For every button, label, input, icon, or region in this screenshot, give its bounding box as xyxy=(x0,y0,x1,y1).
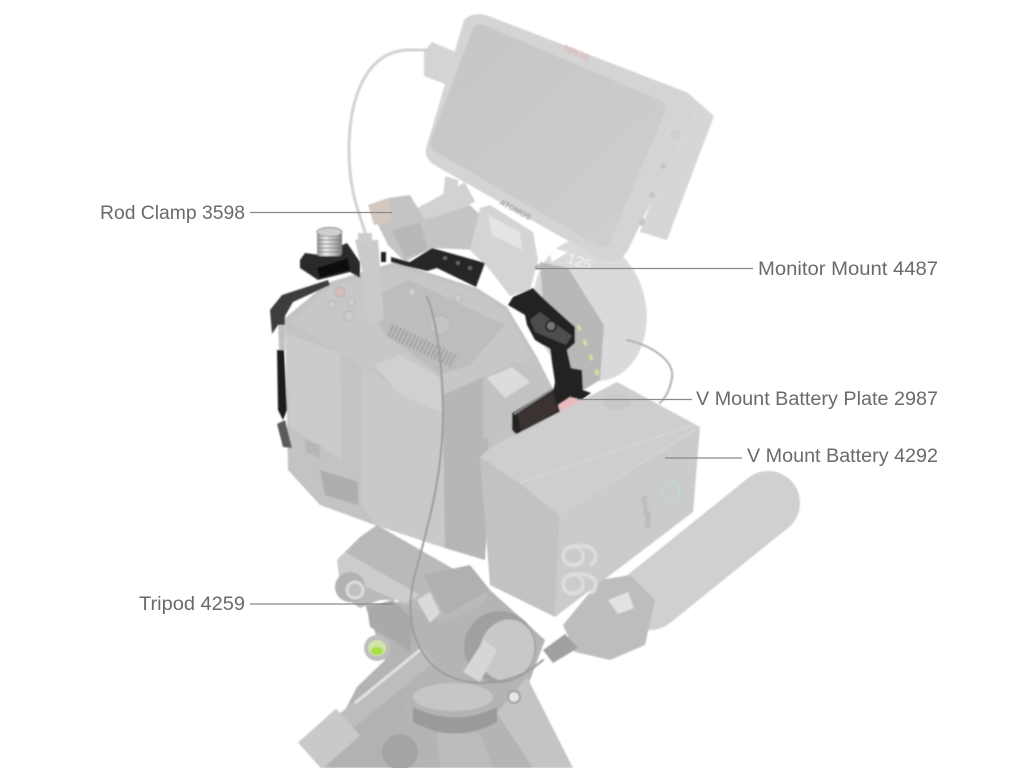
cage top handle mount xyxy=(300,243,360,280)
tripod xyxy=(310,525,573,768)
bracket upper highlight xyxy=(530,312,572,345)
quick release base xyxy=(335,525,490,653)
monitor side buttons xyxy=(638,128,682,226)
monitor xyxy=(424,14,714,262)
bracket screw xyxy=(546,321,556,331)
seam line xyxy=(520,425,693,483)
body silhouette xyxy=(285,262,560,560)
battery back side xyxy=(480,457,560,617)
left leg xyxy=(320,687,413,768)
mount thumb screw xyxy=(608,592,634,614)
top deck xyxy=(290,268,532,395)
NINJA logo: NINJA xyxy=(562,43,591,63)
cage right bracket xyxy=(508,288,591,440)
top rod clamp xyxy=(368,195,490,262)
heat vents xyxy=(390,330,455,362)
monitor mount xyxy=(470,205,541,296)
tripod head xyxy=(463,611,543,688)
ATOMOS logo: ATOMOS xyxy=(498,198,533,222)
upper disc xyxy=(413,683,493,711)
lens cable xyxy=(627,340,672,403)
right grip block xyxy=(483,362,548,440)
label: V mount battery: V Mount Battery 4292 xyxy=(747,446,938,467)
ribbed collar xyxy=(413,707,497,734)
center battery xyxy=(362,367,445,548)
lower body button xyxy=(320,470,358,505)
monitor cable xyxy=(349,50,428,232)
bubble level xyxy=(364,635,390,661)
battery logo ring xyxy=(662,482,680,500)
mount circle xyxy=(603,394,631,410)
grip hump xyxy=(375,355,443,413)
product illustration xyxy=(270,14,768,768)
support rods xyxy=(396,176,470,232)
side bolt xyxy=(508,691,520,703)
monitor frame xyxy=(426,14,695,262)
center bracket xyxy=(437,733,493,768)
microphone mount xyxy=(563,575,655,660)
plate highlight xyxy=(514,389,553,414)
label: rod clamp: Rod Clamp 3598 xyxy=(100,203,245,224)
focus gear ring xyxy=(540,262,604,400)
shotgun microphone xyxy=(543,503,768,663)
rod holder post xyxy=(355,233,384,325)
HDMI connector xyxy=(424,42,463,84)
leg knob xyxy=(382,734,418,768)
lens markings xyxy=(548,247,600,380)
tripod backing xyxy=(320,590,573,768)
label: monitor mount: Monitor Mount 4487 xyxy=(758,259,938,280)
cage top bracket xyxy=(381,248,485,287)
camera cable xyxy=(411,297,543,683)
left battery tab xyxy=(305,440,320,458)
monitor screen xyxy=(430,24,666,247)
dark side band xyxy=(443,377,490,560)
lens xyxy=(520,228,660,400)
camera body xyxy=(285,262,560,560)
label: V mount battery plate: V Mount Battery Plate 2987 xyxy=(696,389,938,410)
V mount battery xyxy=(480,382,700,617)
monitor back plate xyxy=(640,95,714,240)
cage left frame xyxy=(270,280,330,448)
battery face xyxy=(555,427,700,617)
pink release tab xyxy=(558,397,582,412)
top panel buttons xyxy=(328,287,462,335)
99 logo: 99 xyxy=(551,541,608,598)
left battery xyxy=(285,333,342,460)
control panel xyxy=(365,280,505,375)
pan handle xyxy=(310,650,428,756)
label: tripod: Tripod 4259 xyxy=(139,594,245,615)
lens markings: 125 xyxy=(565,250,594,274)
right leg xyxy=(497,677,573,768)
cables xyxy=(349,50,672,683)
SmallRig logo: SmallRig xyxy=(639,495,653,528)
XLR plug xyxy=(543,634,578,663)
battery plate face xyxy=(517,392,558,434)
knurled screw xyxy=(317,228,342,256)
battery top xyxy=(480,382,700,515)
